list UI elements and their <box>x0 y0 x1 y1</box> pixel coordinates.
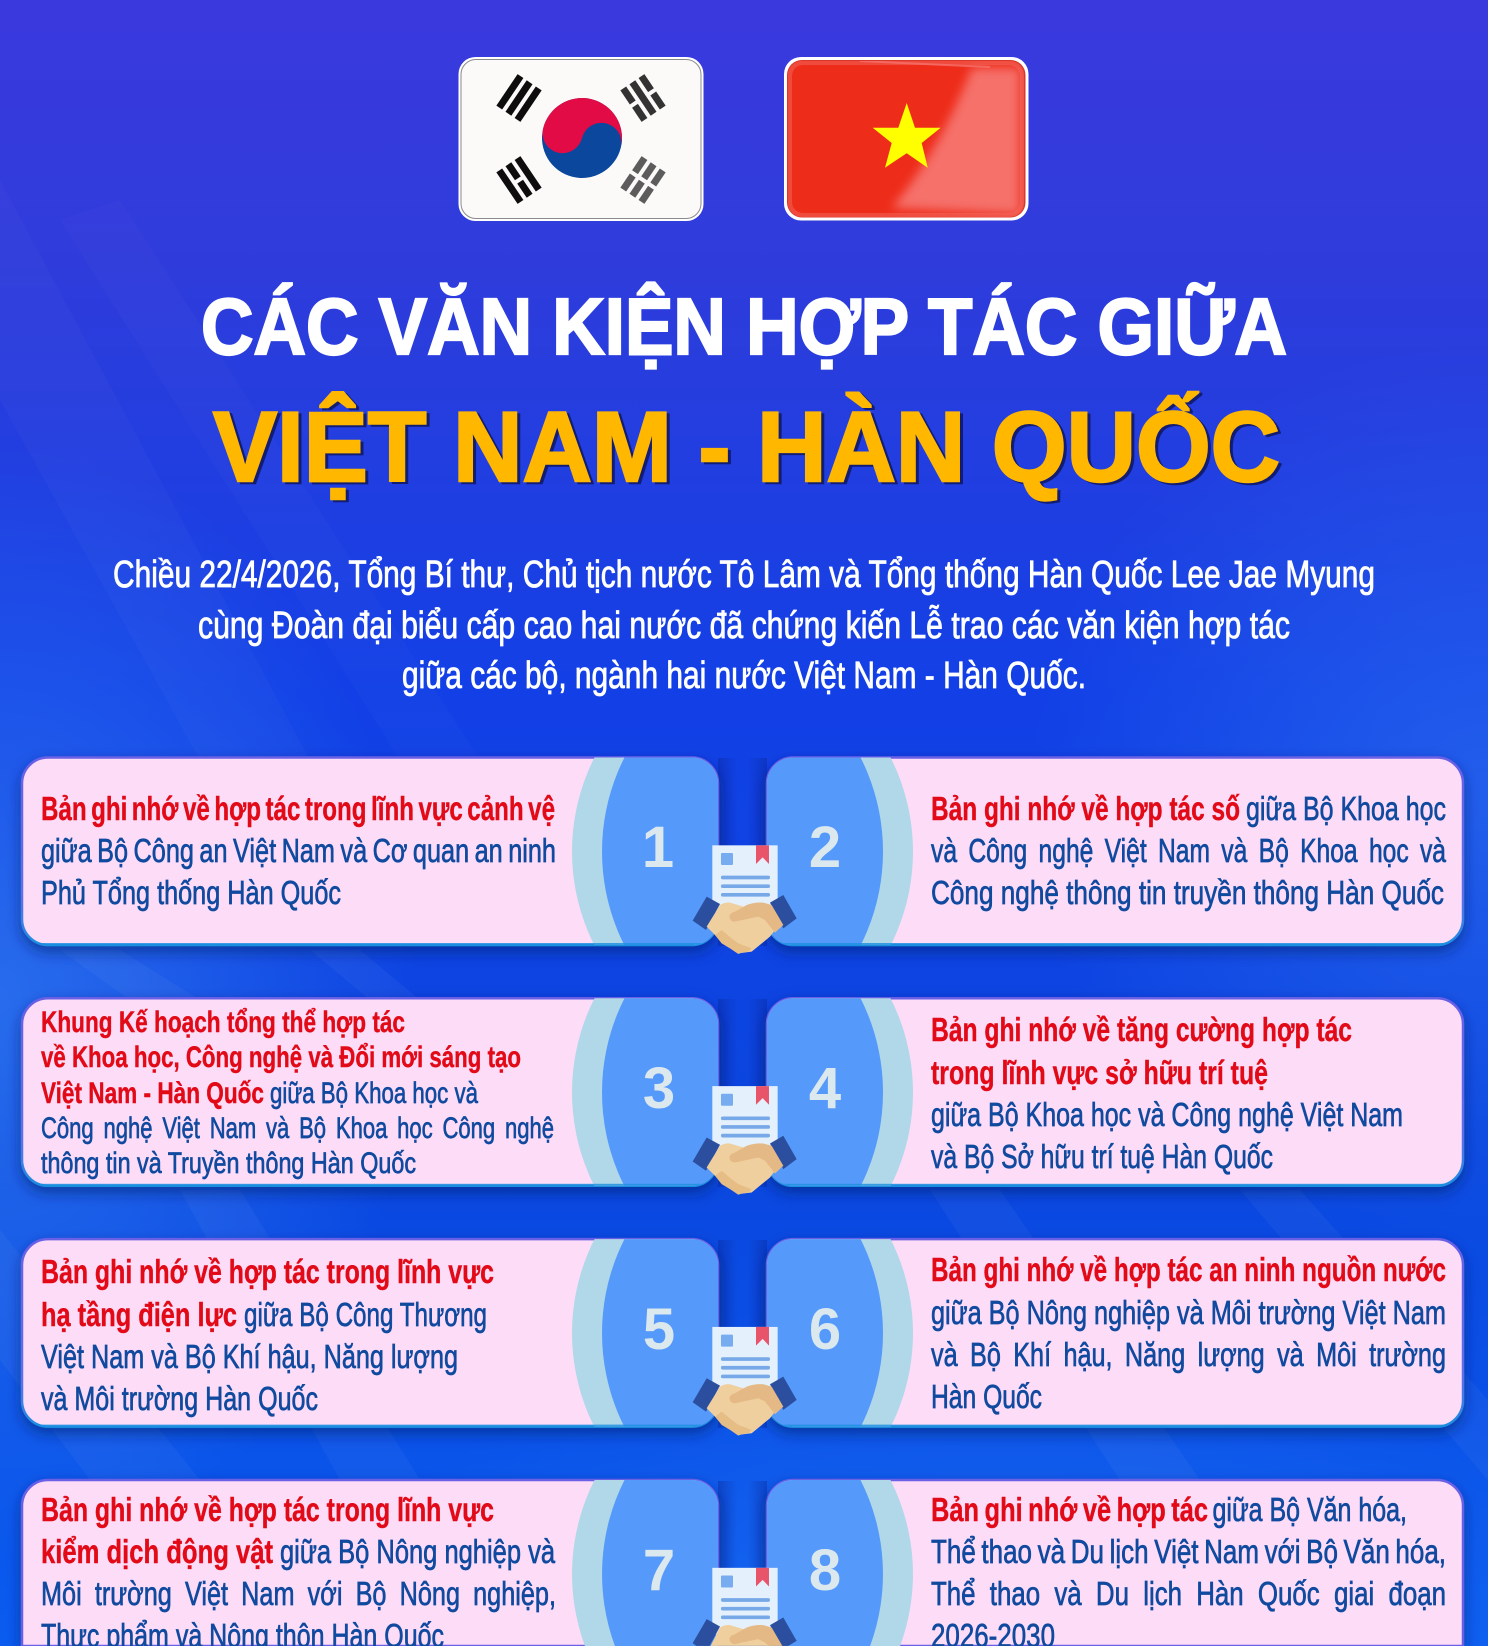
panel 1: giữa Bộ Công an Việt Nam và Cơ quan an ninh <box>41 832 556 869</box>
panel 5 <box>22 1125 1018 1541</box>
panel 7: Môi trường Việt Nam với Bộ Nông nghiệp, <box>41 1575 556 1612</box>
panel 7: Bản ghi nhớ về hợp tác trong lĩnh vực <box>41 1491 494 1528</box>
panel 4: Bản ghi nhớ về tăng cường hợp tác <box>931 1011 1352 1048</box>
panel 3: Việt Nam - Hàn Quốc <box>41 1077 264 1110</box>
gap between panels 5 and 6 <box>718 1240 767 1428</box>
intro paragraph <box>113 554 1375 697</box>
panel 4: và Bộ Sở hữu trí tuệ Hàn Quốc <box>931 1138 1273 1175</box>
panel 8: Bản ghi nhớ về hợp tác <box>931 1491 1208 1528</box>
flag: Vietnam <box>784 57 1028 220</box>
panel 3: thông tin và Truyền thông Hàn Quốc <box>41 1147 416 1180</box>
panel 5: hạ tầng điện lực <box>41 1296 237 1333</box>
panel 5: giữa Bộ Công Thương <box>244 1296 487 1333</box>
icon: document and handshake <box>693 845 797 954</box>
panel 7 <box>22 1480 718 1646</box>
gap between panels 3 and 4 <box>718 999 767 1187</box>
panel 1: Bản ghi nhớ về hợp tác trong lĩnh vực cảnh vệ <box>41 790 555 827</box>
panel 2: Bản ghi nhớ về hợp tác số <box>931 790 1240 827</box>
icon: document and handshake <box>693 1086 797 1195</box>
panel 7: kiểm dịch động vật <box>41 1533 273 1570</box>
panel 6: 6 <box>809 1297 841 1362</box>
panel 6: Hàn Quốc <box>931 1378 1042 1415</box>
row 4 <box>22 1480 1463 1646</box>
panel 6 <box>467 1125 1463 1541</box>
flag: South Korea <box>458 57 704 221</box>
panel 4: 4 <box>809 1056 841 1121</box>
panel 4: trong lĩnh vực sở hữu trí tuệ <box>931 1054 1268 1091</box>
panel 8 <box>767 1480 1463 1646</box>
panel 5: 5 <box>643 1297 675 1362</box>
panel 3: 3 <box>643 1056 675 1121</box>
row 1 <box>22 644 1463 1060</box>
panel 4 <box>467 884 1463 1300</box>
panel 3 <box>22 884 1018 1300</box>
gap between panels 7 and 8 <box>718 1481 767 1646</box>
panel 5: Bản ghi nhớ về hợp tác trong lĩnh vực <box>41 1253 494 1290</box>
panel 8: 8 <box>809 1538 841 1603</box>
panel 1: Phủ Tổng thống Hàn Quốc <box>41 874 341 911</box>
panel 1: 1 <box>642 815 674 880</box>
panel 3: Khung Kế hoạch tổng thể hợp tác <box>41 1006 405 1039</box>
panel 5: và Môi trường Hàn Quốc <box>41 1380 318 1417</box>
panel 7: 7 <box>643 1538 675 1603</box>
panel 7: giữa Bộ Nông nghiệp và <box>280 1533 555 1570</box>
title line 2: VIỆT NAM - HÀN QUỐC <box>213 391 1280 502</box>
row 2 <box>22 884 1463 1300</box>
row 3 <box>22 1125 1463 1541</box>
gap between panels 1 and 2 <box>718 758 767 946</box>
panel 2: 2 <box>809 815 841 880</box>
intro paragraph: giữa các bộ, ngành hai nước Việt Nam - Hàn Quốc. <box>402 655 1086 697</box>
panel 3: Công nghệ Việt Nam và Bộ Khoa học Công nghệ <box>41 1112 554 1145</box>
panel 8: giữa Bộ Văn hóa, <box>1212 1491 1407 1528</box>
title line 1: CÁC VĂN KIỆN HỢP TÁC GIỮA <box>201 282 1287 371</box>
panel 1 <box>22 644 1018 1060</box>
panel 3: về Khoa học, Công nghệ và Đổi mới sáng tạo <box>41 1041 521 1074</box>
panel 3: giữa Bộ Khoa học và <box>270 1077 478 1110</box>
panel 2 <box>467 644 1463 1060</box>
icon: document and handshake <box>693 1568 797 1646</box>
icon: document and handshake <box>693 1327 797 1436</box>
title <box>201 282 1287 502</box>
panel 5: Việt Nam và Bộ Khí hậu, Năng lượng <box>41 1338 458 1375</box>
